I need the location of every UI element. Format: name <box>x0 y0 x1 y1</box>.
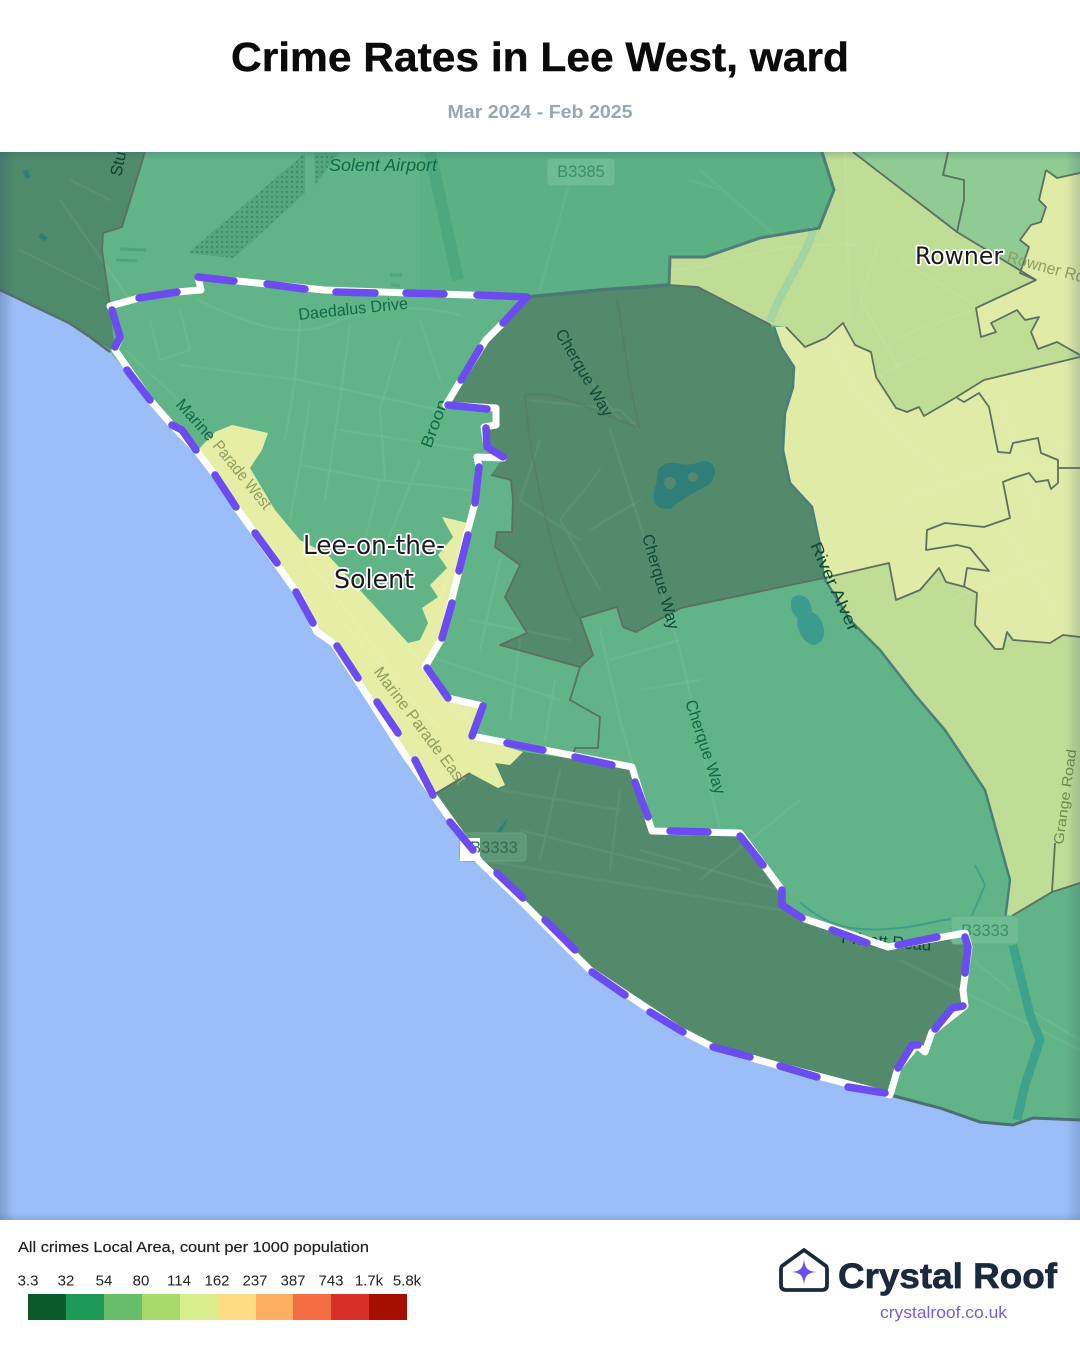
wordmark: Crystal Roof <box>838 1257 1057 1296</box>
legend values: 114 <box>167 1272 191 1290</box>
legend values: 1.7k <box>355 1272 384 1290</box>
road badge: B3333 east: B3333 <box>961 922 1009 940</box>
map base: land green <box>100 152 1080 1124</box>
town label: Lee-on-the-Solent <box>304 532 446 590</box>
region: north-east green area <box>420 152 834 297</box>
legend values: 80 <box>133 1272 149 1290</box>
road and place labels: Solent Airport <box>329 155 438 175</box>
sea <box>0 290 1080 1220</box>
town label: Rowner: Rowner <box>915 242 1003 270</box>
road and place labels: Cherque Way <box>638 532 683 632</box>
road badge: B3333 west: B3333 <box>470 839 518 857</box>
map <box>0 150 1080 1220</box>
legend values <box>18 1272 422 1290</box>
legend <box>18 1239 422 1320</box>
region: light green Rowner <box>669 152 1080 416</box>
region: yellow east <box>774 323 1080 649</box>
subtitle: date range: Mar 2024 - Feb 2025 <box>448 101 632 122</box>
road and place labels: Daedalus Drive <box>298 295 409 324</box>
roads and street network <box>20 152 1080 1050</box>
legend values: 54 <box>96 1272 112 1290</box>
legend values: 237 <box>242 1272 268 1290</box>
icon: house with star <box>781 1250 827 1290</box>
road and place labels: River Alver <box>806 539 862 635</box>
road and place labels: Privett Road <box>841 929 932 955</box>
map edge shading <box>0 152 1080 1220</box>
town label: Lee-on-the-Solent: Lee-on-the- <box>303 531 445 561</box>
road and place labels <box>107 150 1080 955</box>
region: west dark green <box>0 152 145 352</box>
road badge: B3385: B3385 <box>557 163 605 181</box>
road and place labels: Broon <box>418 397 452 450</box>
legend values: 162 <box>204 1272 230 1290</box>
road and place labels: Parade West <box>209 437 275 513</box>
road and place labels: Marine <box>172 396 219 445</box>
region: south dark green <box>433 752 969 1095</box>
legend values: 3.3 <box>18 1272 38 1290</box>
road and place labels: Marine Parade East <box>370 664 470 788</box>
road badge: B3333 east <box>951 916 1019 944</box>
legend values: 32 <box>58 1272 74 1290</box>
airport runway and dotted area <box>116 152 458 286</box>
region: light green south-east <box>824 563 1080 920</box>
water: ponds and river <box>25 170 1040 1120</box>
legend values: 743 <box>318 1272 344 1290</box>
road and place labels: Cherque Way <box>681 698 729 797</box>
road and place labels: Stu <box>107 150 130 178</box>
region boundaries <box>0 152 1080 1125</box>
legend values: 5.8k <box>393 1272 422 1290</box>
region: central dark green <box>446 285 824 667</box>
region: Lee-on-the-Solent yellow strip <box>198 425 523 795</box>
region: yellow north-east <box>976 170 1080 357</box>
website url: crystalroof.co.uk <box>880 1304 1008 1322</box>
road badge: B3333 west <box>460 833 526 861</box>
legend values: 387 <box>280 1272 306 1290</box>
road and place labels: Cherque Way <box>552 326 616 421</box>
road badge: B3385 <box>547 158 615 186</box>
legend title: All crimes Local Area, count per 1000 population <box>18 1239 369 1256</box>
ward boundary dashes <box>112 277 968 1093</box>
region: pale green north-east <box>853 152 1080 273</box>
legend colour scale <box>28 1294 407 1320</box>
road and place labels: Grange Road <box>1050 748 1079 845</box>
town label: Lee-on-the-Solent: Solent <box>334 565 414 595</box>
logo: Crystal Roof <box>781 1250 1057 1322</box>
ward boundary: Lee West <box>110 277 969 1095</box>
title: Crime Rates in Lee West, ward <box>231 34 849 80</box>
